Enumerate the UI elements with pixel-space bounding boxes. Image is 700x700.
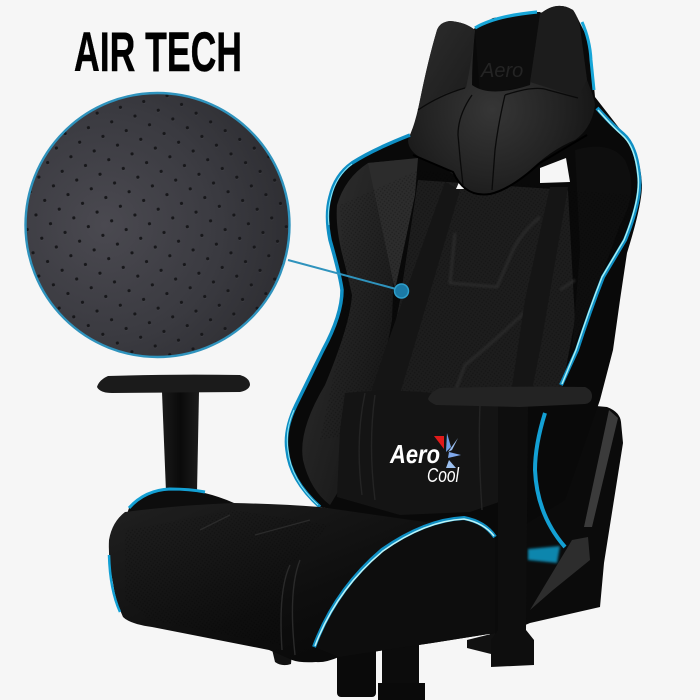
LED strip: left edge: [286, 135, 410, 507]
headrest gap small: [456, 180, 464, 189]
lumbar logo: [389, 433, 461, 487]
LED strip: inner right: [535, 413, 565, 547]
side panel grey strip: [584, 410, 618, 527]
headrest seams: [418, 88, 578, 190]
left shoulder strap: [362, 182, 460, 420]
left arm post: [162, 392, 199, 492]
headrest logo emboss: Aero: [480, 60, 523, 82]
title: AIR TECH: [74, 20, 242, 83]
backrest center: [380, 180, 575, 400]
left seat wing: [125, 488, 234, 520]
LED glow panel: [528, 546, 560, 563]
seat lock lever: [530, 537, 590, 610]
headrest lower pad and wings: [408, 6, 595, 195]
back side panel: [490, 400, 623, 640]
backrest center contour: [450, 217, 575, 400]
LED strip: seat bolster: [314, 518, 495, 647]
headrest gap: [540, 158, 570, 183]
logo text Cool: Cool: [427, 465, 459, 487]
headrest left wing: [418, 21, 475, 110]
logo star: [434, 433, 461, 468]
headrest right wing: [530, 6, 587, 97]
headrest lower edge: [413, 135, 587, 195]
lumbar pillow seams: [359, 393, 482, 510]
lumbar pillow: [337, 391, 505, 515]
seat back frame: [286, 12, 642, 540]
panel: gaming chair: [97, 6, 642, 700]
backrest right wing: [572, 147, 631, 350]
chair base column: [271, 640, 425, 700]
LED strip: seat edge left: [109, 555, 120, 612]
material close-up circle: [26, 93, 290, 357]
seat cushion: [109, 503, 495, 662]
seat seams: [200, 515, 310, 655]
LED strip: left seat wing: [129, 489, 205, 508]
LED strip: headrest top: [475, 12, 537, 28]
right shoulder strap: [510, 187, 568, 400]
lower beam: [467, 633, 495, 655]
logo text Aero: Aero: [389, 439, 440, 469]
backrest texture: [320, 170, 636, 440]
callout line: [288, 260, 396, 289]
backrest left wing: [302, 160, 398, 505]
right arm post: [491, 406, 534, 667]
callout dot: [394, 284, 408, 298]
backrest left wing upper: [368, 158, 418, 290]
LED strip: top right: [582, 22, 594, 90]
seat side bolster: [314, 518, 495, 657]
headrest back: [475, 12, 560, 95]
right armrest: [428, 387, 592, 407]
seat texture: [125, 510, 330, 645]
left armrest: [97, 375, 250, 393]
LED strip: right edge: [561, 108, 639, 385]
